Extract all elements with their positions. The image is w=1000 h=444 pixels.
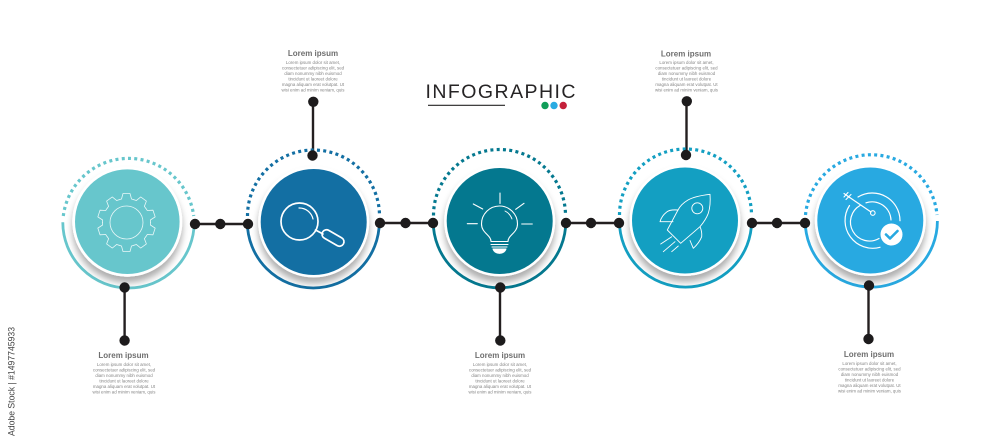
- text block 2: Lorem ipsum dolor sit amet,: [286, 60, 340, 65]
- icon: gear: [97, 194, 156, 252]
- connector nodes: [119, 96, 874, 346]
- stock credit: Adobe Stock | #1497745933: [6, 327, 18, 436]
- title: INFOGRAPHIC: [426, 81, 576, 103]
- text block 4: [655, 50, 719, 92]
- text block 2: Lorem ipsum: [288, 49, 338, 58]
- text block 3: tincidunt ut laoreet dolore: [475, 378, 525, 384]
- text block 2: tincidunt ut laoreet dolore: [288, 76, 338, 82]
- connector lines: [125, 101, 869, 340]
- text block 2: diam nonummy nibh euismod: [284, 71, 342, 76]
- colored dots: [541, 102, 567, 109]
- text block 2: [282, 49, 345, 92]
- text block 3: diam nonummy nibh euismod: [471, 373, 529, 378]
- step 1: gear circle: [63, 158, 194, 288]
- text block 1: diam nonummy nibh euismod: [95, 373, 153, 378]
- icon: light bulb: [467, 193, 532, 253]
- text block 4: diam nonummy nibh euismod: [658, 71, 716, 76]
- text block 2: consectetuer adipiscing elit, sed: [282, 66, 345, 70]
- text block 1: [93, 351, 156, 394]
- text block 5: tincidunt ut laoreet dolore: [845, 378, 895, 382]
- text block 1: Lorem ipsum: [98, 351, 149, 360]
- text block 5: consectetuer adipiscing elit, sed: [838, 366, 901, 372]
- text block 5: Lorem ipsum dolor sit amet,: [842, 361, 897, 366]
- text block 2: magna aliquam erat volutpat. Ut: [282, 82, 345, 87]
- icon: target with arrow: [844, 192, 902, 248]
- text block 4: tincidunt ut laoreet dolore: [662, 76, 712, 82]
- text block 1: consectetuer adipiscing elit, sed: [93, 368, 156, 372]
- text block 3: Lorem ipsum dolor sit amet,: [473, 362, 527, 367]
- text block 4: Lorem ipsum: [661, 50, 711, 58]
- text block 4: consectetuer adipiscing elit, sed: [655, 66, 718, 70]
- text block 5: wisi enim ad minim veniam, quis: [838, 388, 902, 394]
- text block 1: tincidunt ut laoreet dolore: [99, 378, 149, 384]
- text block 4: wisi enim ad minim veniam, quis: [655, 88, 719, 92]
- icon: rocket: [660, 194, 710, 252]
- step 5: target circle: [805, 155, 937, 287]
- text block 3: Lorem ipsum: [475, 351, 525, 360]
- step 2: magnifier circle: [247, 150, 380, 288]
- text block 3: magna aliquam erat volutpat. Ut: [469, 384, 532, 389]
- step 4: rocket circle: [619, 149, 752, 287]
- text block 5: magna aliquam erat volutpat. Ut: [838, 383, 901, 388]
- text block 3: consectetuer adipiscing elit, sed: [469, 368, 532, 372]
- text block 4: magna aliquam erat volutpat. Ut: [655, 82, 718, 87]
- text block 5: [838, 350, 902, 394]
- text block 5: Lorem ipsum: [844, 350, 894, 359]
- step 3: light bulb circle: [433, 150, 566, 288]
- text block 1: wisi enim ad minim veniam, quis: [93, 390, 156, 394]
- text block 4: Lorem ipsum dolor sit amet,: [659, 60, 714, 65]
- text block 3: wisi enim ad minim veniam, quis: [469, 390, 532, 394]
- text block 2: wisi enim ad minim veniam, quis: [282, 88, 345, 92]
- icon: check badge: [880, 224, 902, 246]
- text block 1: magna aliquam erat volutpat. Ut: [93, 384, 156, 389]
- icon: magnifying glass: [281, 203, 346, 248]
- text block 3: [469, 351, 532, 394]
- text block 1: Lorem ipsum dolor sit amet,: [97, 362, 151, 367]
- text block 5: diam nonummy nibh euismod: [841, 372, 899, 377]
